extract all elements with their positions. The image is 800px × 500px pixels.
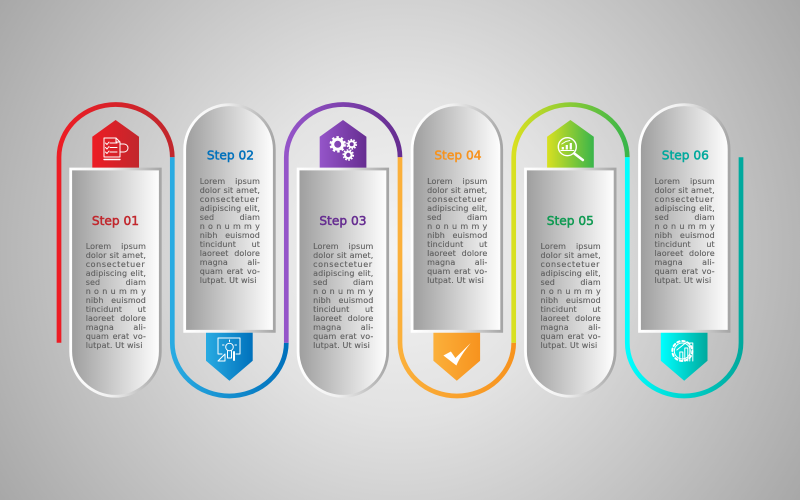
body text: quam erat vo- xyxy=(200,266,260,276)
body text: laoreet dolore xyxy=(540,314,601,323)
body text: Lorem ipsum xyxy=(427,176,487,186)
body text: sed diam xyxy=(86,278,146,287)
body text: lutpat. Ut wisi xyxy=(313,341,370,350)
body text: Lorem ipsum xyxy=(540,242,601,251)
body text xyxy=(540,242,601,352)
card xyxy=(298,169,388,396)
body text: lutpat. Ut wisi xyxy=(540,341,597,350)
body text: lutpat. Ut wisi xyxy=(86,341,143,350)
body text: nibh euismod xyxy=(654,230,715,240)
body text: n o n u m m y xyxy=(427,222,487,230)
card xyxy=(640,105,729,331)
body text: nibh euismod xyxy=(313,296,373,305)
body text: dolor sit amet, xyxy=(427,186,487,194)
body text: lutpat. Ut wisi xyxy=(654,276,711,284)
card xyxy=(412,105,502,331)
body text: dolor sit amet, xyxy=(540,251,601,260)
body text: laoreet dolore xyxy=(313,314,373,323)
panel: step 06 xyxy=(640,105,729,381)
badge: blue pentagon xyxy=(206,328,253,381)
panel: step 04 xyxy=(412,105,502,381)
body text: magna ali- xyxy=(540,323,601,332)
body text: nibh euismod xyxy=(200,230,260,240)
body text: consectetuer xyxy=(200,194,259,204)
body text: sed diam xyxy=(654,212,715,222)
panel: step 05 xyxy=(526,120,615,396)
heading: Step 01 xyxy=(92,214,139,228)
card xyxy=(185,105,274,331)
body text: tincidunt ut xyxy=(200,240,260,248)
body text: tincidunt ut xyxy=(86,305,146,314)
connector: red xyxy=(59,104,172,343)
body text: laoreet dolore xyxy=(427,248,487,258)
icon: checklist and mug xyxy=(104,138,128,160)
body text: nibh euismod xyxy=(540,296,601,305)
body text: magna ali- xyxy=(86,323,146,332)
badge: orange pentagon xyxy=(433,328,480,381)
body text xyxy=(427,176,488,286)
body text: Lorem ipsum xyxy=(313,242,373,251)
body text xyxy=(313,242,374,352)
body text: magna ali- xyxy=(427,258,487,266)
body text: adipiscing elit, xyxy=(427,204,487,212)
body text: tincidunt ut xyxy=(540,305,601,314)
body text: tincidunt ut xyxy=(427,240,487,248)
connector: blue xyxy=(172,157,286,396)
connector: orange xyxy=(400,157,514,396)
panel: step 02 xyxy=(185,105,274,381)
body text: quam erat vo- xyxy=(313,332,373,341)
card xyxy=(526,169,615,396)
card xyxy=(71,169,160,396)
body text: adipiscing elit, xyxy=(86,269,146,278)
body text: tincidunt ut xyxy=(654,240,715,248)
body text xyxy=(86,242,147,352)
body text: laoreet dolore xyxy=(654,248,715,258)
body text: sed diam xyxy=(200,212,260,222)
body text: quam erat vo- xyxy=(427,266,487,276)
body text: dolor sit amet, xyxy=(654,186,715,194)
panel: step 03 xyxy=(298,120,388,396)
body text: dolor sit amet, xyxy=(200,186,260,194)
body text: magna ali- xyxy=(313,323,373,332)
icon: check mark xyxy=(443,343,471,366)
body text: quam erat vo- xyxy=(540,332,601,341)
icon: gear with chart xyxy=(672,341,693,361)
body text: n o n u m m y xyxy=(540,287,601,296)
body text: n o n u m m y xyxy=(313,287,373,296)
badge: purple house xyxy=(320,120,366,172)
icon: magnifier with chart xyxy=(558,138,583,160)
body text xyxy=(654,176,715,286)
body text: tincidunt ut xyxy=(313,305,373,314)
body text: laoreet dolore xyxy=(200,248,260,258)
connector: purple xyxy=(286,104,400,343)
body text: sed diam xyxy=(540,278,601,287)
body text: consectetuer xyxy=(86,260,145,269)
heading: Step 02 xyxy=(207,149,254,163)
body text: dolor sit amet, xyxy=(86,251,146,260)
body text: Lorem ipsum xyxy=(86,242,146,251)
body text: n o n u m m y xyxy=(86,287,146,296)
heading: Step 03 xyxy=(319,214,366,228)
badge: red house xyxy=(92,120,139,172)
badge: cyan pentagon xyxy=(661,328,708,381)
body text: nibh euismod xyxy=(427,230,487,240)
body text: consectetuer xyxy=(654,194,714,204)
body text: lutpat. Ut wisi xyxy=(200,276,257,284)
heading: Step 04 xyxy=(434,149,482,163)
body text: adipiscing elit, xyxy=(200,204,260,212)
body text: quam erat vo- xyxy=(86,332,146,341)
body text: dolor sit amet, xyxy=(313,251,373,260)
body text: Lorem ipsum xyxy=(200,176,260,186)
body text: lutpat. Ut wisi xyxy=(427,276,484,284)
heading: Step 05 xyxy=(547,214,594,228)
body text: sed diam xyxy=(313,278,373,287)
body text: n o n u m m y xyxy=(654,222,715,230)
body text: consectetuer xyxy=(313,260,373,269)
icon: gears xyxy=(331,137,356,160)
badge: green house xyxy=(547,120,594,172)
body text: quam erat vo- xyxy=(654,266,715,276)
connector: lime xyxy=(514,105,627,343)
heading: Step 06 xyxy=(662,149,709,163)
connector: cyan xyxy=(627,157,741,396)
body text: nibh euismod xyxy=(86,296,146,305)
body text: magna ali- xyxy=(200,258,260,266)
body text: n o n u m m y xyxy=(200,222,260,230)
icon: blueprint with light bulb xyxy=(218,338,240,361)
body text: laoreet dolore xyxy=(86,314,146,323)
body text: consectetuer xyxy=(540,260,600,269)
body text: adipiscing elit, xyxy=(654,204,715,212)
body text: adipiscing elit, xyxy=(313,269,373,278)
body text: consectetuer xyxy=(427,194,487,204)
body text: magna ali- xyxy=(654,258,715,266)
body text: adipiscing elit, xyxy=(540,269,601,278)
body text xyxy=(200,176,261,286)
body text: Lorem ipsum xyxy=(654,176,715,186)
panel: step 01 xyxy=(71,120,160,396)
body text: sed diam xyxy=(427,212,487,222)
